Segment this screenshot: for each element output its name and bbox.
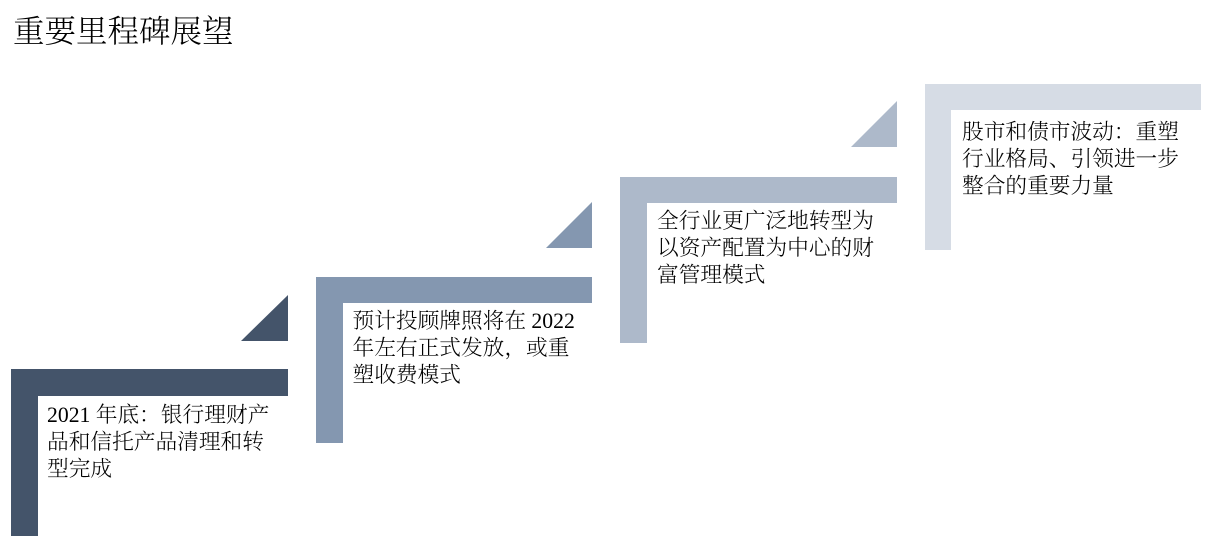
step 4 text — [962, 120, 1179, 198]
step 4 text: 行业格局、引领进一步 — [962, 147, 1179, 171]
step 4 text: 股市和债市波动：重塑 — [962, 120, 1179, 144]
step 1 marker — [241, 295, 288, 341]
step 2 marker — [546, 202, 592, 248]
step 1 text: 型完成 — [47, 457, 112, 481]
step 3 text: 以资产配置为中心的财 — [657, 236, 874, 260]
step 4 bracket — [925, 84, 1201, 250]
title: 重要里程碑展望 — [13, 14, 234, 49]
step 1 text — [47, 403, 269, 481]
step 3 text — [657, 209, 874, 287]
step 3 text: 全行业更广泛地转型为 — [657, 209, 874, 233]
step 1 text: 2021 年底：银行理财产 — [47, 403, 269, 427]
step 2 text — [352, 309, 575, 387]
step 4 text: 整合的重要力量 — [962, 174, 1114, 198]
step 3 text: 富管理模式 — [657, 263, 765, 287]
step 2 bracket — [316, 277, 592, 443]
step 1 bracket — [11, 369, 288, 536]
step 1 text: 品和信托产品清理和转 — [47, 430, 264, 454]
step 3 bracket — [620, 177, 897, 343]
step 2 text: 年左右正式发放，或重 — [352, 336, 569, 360]
step 2 text: 预计投顾牌照将在 2022 — [352, 309, 575, 333]
step 2 text: 塑收费模式 — [352, 363, 461, 387]
step 3 marker — [851, 101, 897, 147]
